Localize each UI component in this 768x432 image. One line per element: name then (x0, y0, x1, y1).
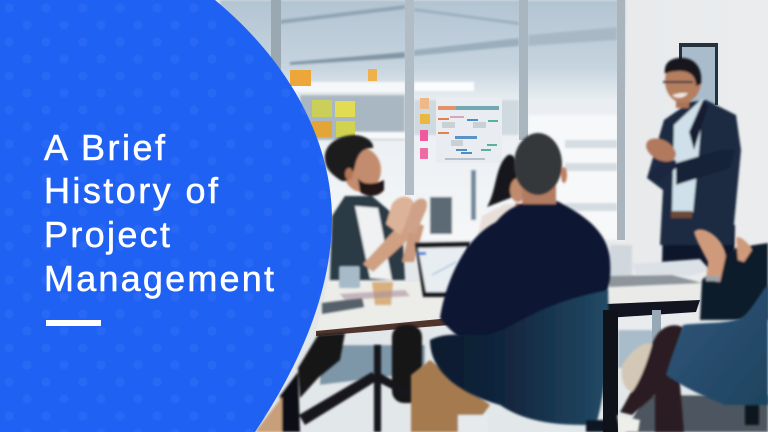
title: Project (44, 214, 170, 255)
notebook (322, 298, 364, 314)
chair: front blue chair (430, 290, 608, 432)
person: man seen from behind (411, 133, 610, 432)
wall chart (436, 97, 502, 163)
dot pattern (0, 0, 332, 432)
floor (280, 310, 768, 432)
title: A Brief (44, 127, 166, 168)
person: presenter standing right (642, 58, 741, 270)
laptop (415, 242, 470, 297)
title: History of (44, 170, 219, 211)
coffee cup (372, 282, 393, 305)
title underline (46, 320, 101, 326)
person: woman with braids (478, 155, 540, 235)
mug (339, 266, 360, 288)
rear table leg (652, 310, 661, 345)
sticky notes (290, 69, 430, 159)
chair: right blue chair (666, 285, 768, 425)
person: man with beard clapping (325, 135, 427, 280)
closed laptop (605, 275, 702, 287)
magazine (632, 259, 710, 276)
person: woman seated right (617, 229, 768, 432)
table items (322, 242, 710, 314)
glass wall (220, 0, 625, 240)
window mullions (271, 0, 625, 240)
conference table (316, 276, 735, 336)
under-table figures and stool (255, 325, 422, 432)
water glasses (610, 245, 632, 277)
blue shape panel (0, 0, 332, 432)
wall frame (679, 43, 718, 105)
table leg (603, 310, 618, 432)
papers (340, 290, 410, 300)
title: Management (44, 258, 274, 299)
